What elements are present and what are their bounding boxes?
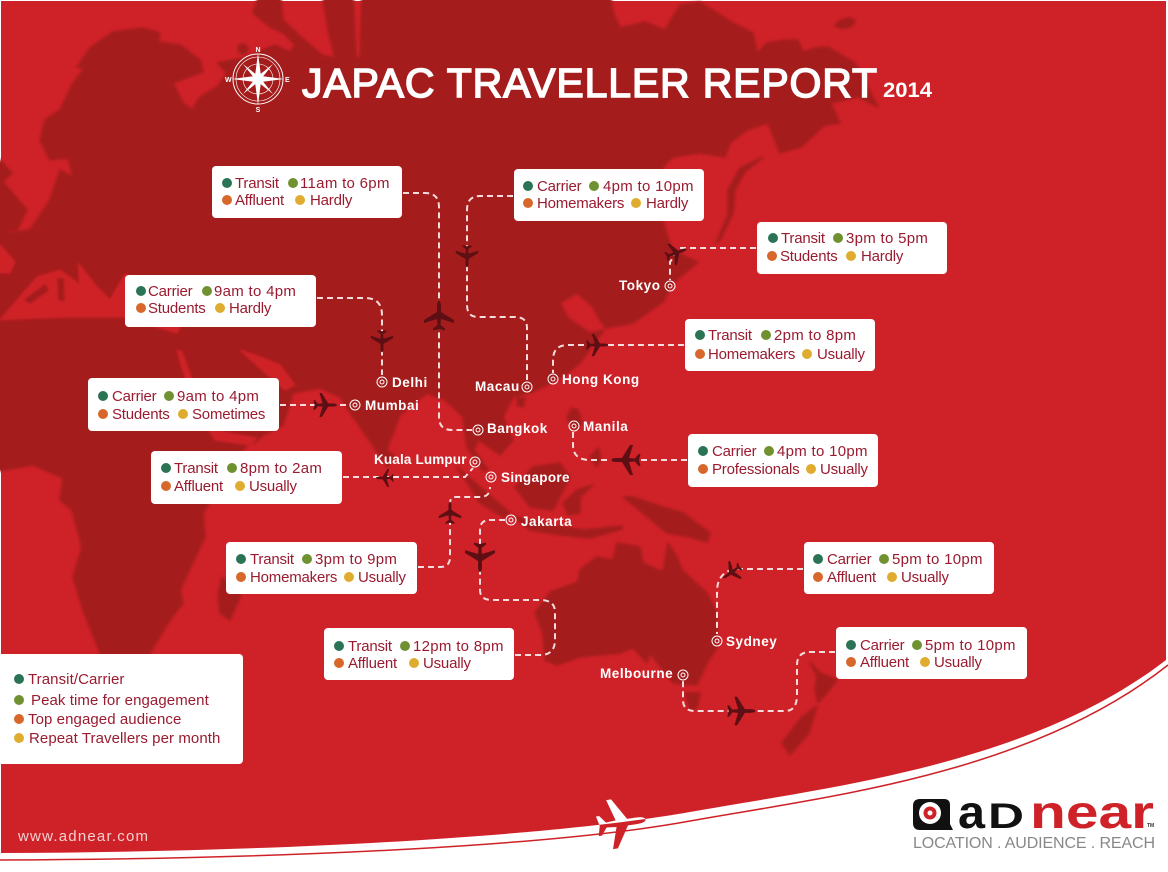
icon: plane to Sydney (717, 558, 746, 587)
Hainan (517, 398, 525, 407)
panel: Carrier 5pm to 10pm Melbourne: 5pm to 10pm (925, 637, 1016, 654)
icon: plane to Hong Kong (586, 334, 608, 356)
trademark: TM (1147, 823, 1154, 829)
panel: Transit 8pm to 2am (151, 451, 342, 504)
panel: Transit 12pm to 8pm: Affluent (348, 655, 398, 672)
logo wordmark: D (988, 797, 1024, 836)
panel: Transit 3pm to 9pm (226, 542, 417, 594)
Arctic islands (835, 18, 855, 28)
Philippines (567, 408, 601, 467)
panel: Carrier 9am to 4pm Students Sometimes: 9am to 4pm (177, 388, 259, 405)
panel: Carrier 5pm to 10pm Melbourne: Carrier (860, 637, 905, 654)
Borneo (515, 463, 570, 510)
panel: Transit 3pm to 5pm: Transit (781, 230, 826, 247)
Mediterranean sea (0, 263, 180, 333)
panel: Carrier 9am to 4pm Students Hardly: Students (148, 300, 206, 317)
legend: Transit/Carrier (28, 671, 124, 688)
panel: Carrier 4pm to 10pm: Homemakers (537, 195, 624, 212)
icon: plane to Delhi (371, 330, 393, 352)
icon: large plane on flight line (596, 799, 646, 850)
Mediterranean islands (25, 279, 64, 303)
panel: Transit 8pm to 2am: Affluent (174, 478, 224, 495)
panel: Carrier 5pm to 10pm Melbourne (836, 627, 1027, 679)
flight routes (280, 193, 835, 711)
panel: Carrier 4pm to 10pm Professionals: 4pm to 10pm (777, 443, 868, 460)
panel: Transit 3pm to 9pm: Homemakers (250, 569, 337, 586)
icon: compass rose: E (285, 77, 290, 84)
panel: Transit 2pm to 8pm: 2pm to 8pm (774, 327, 856, 344)
city marker: Kuala Lumpur: Kuala Lumpur (374, 452, 467, 467)
icon: plane to Melbourne (727, 697, 755, 725)
legend: Repeat Travellers per month (29, 730, 220, 747)
icon: plane to Jakarta (465, 542, 495, 572)
Bay of Biscay (0, 245, 15, 273)
panel: Transit 3pm to 9pm: Transit (250, 551, 295, 568)
panel: Carrier 4pm to 10pm Professionals: Carrier (712, 443, 757, 460)
title year: 2014 (883, 79, 932, 102)
Persian Gulf (240, 350, 295, 390)
icon: plane to Kuala Lumpur (376, 469, 394, 487)
panel: Carrier 5pm to 10pm Sydney: Usually (901, 569, 949, 586)
panel: Transit 12pm to 8pm: 12pm to 8pm (413, 638, 504, 655)
panel: Carrier 9am to 4pm Students Sometimes: Sometimes (192, 406, 265, 423)
Red Sea (177, 350, 257, 445)
panel: Transit 2pm to 8pm (685, 319, 875, 371)
panel: Transit 12pm to 8pm: Usually (423, 655, 471, 672)
panel: Transit 3pm to 5pm (757, 222, 947, 274)
panel: Carrier 4pm to 10pm: Hardly (646, 195, 689, 212)
icon: plane to Macau (456, 245, 478, 267)
adnear logo (913, 786, 1155, 852)
Sulawesi (563, 485, 593, 515)
New Guinea (623, 497, 710, 542)
city marker: Tokyo: Tokyo (619, 278, 661, 293)
panel: Transit 8pm to 2am: 8pm to 2am (240, 460, 322, 477)
Sri Lanka (384, 450, 395, 467)
legend (0, 654, 243, 764)
logo icon (913, 799, 953, 830)
city marker: Macau: Macau (475, 379, 520, 394)
Australia (535, 543, 718, 685)
panel: Carrier 4pm to 10pm Professionals: Professionals (712, 461, 799, 478)
Java (513, 516, 622, 538)
panel: Transit 11am to 6pm: Hardly (310, 192, 353, 209)
world map (0, 0, 878, 755)
panel: Carrier 9am to 4pm Students Sometimes: Carrier (112, 388, 157, 405)
panel: Transit 11am to 6pm: 11am to 6pm (300, 175, 390, 192)
panel: Transit 8pm to 2am: Transit (174, 460, 219, 477)
panel: Carrier 5pm to 10pm Sydney (804, 542, 994, 594)
panel: Carrier 9am to 4pm Students Hardly: 9am to 4pm (214, 283, 296, 300)
logo wordmark: near (1030, 786, 1154, 838)
panel: Carrier 5pm to 10pm Sydney: Carrier (827, 551, 872, 568)
Madagascar (218, 577, 241, 620)
curved flight line (0, 665, 1168, 860)
panel: Transit 2pm to 8pm: Transit (708, 327, 753, 344)
panel: Transit 3pm to 9pm: Usually (358, 569, 406, 586)
panel: Carrier 4pm to 10pm: Carrier (537, 178, 582, 195)
icon: compass rose: S (256, 107, 261, 114)
New Zealand (782, 662, 837, 755)
Tasmania (685, 693, 700, 710)
city marker: Jakarta: Jakarta (521, 514, 572, 529)
Eurasia and Africa landmass (0, 0, 878, 665)
panel: Transit 2pm to 8pm: Usually (817, 346, 865, 363)
city marker: Mumbai: Mumbai (365, 398, 419, 413)
city marker: Manila: Manila (583, 419, 628, 434)
city marker: Sydney: Sydney (726, 634, 777, 649)
legend: Top engaged audience (28, 711, 181, 728)
panel: Carrier 4pm to 10pm Professionals (688, 434, 878, 487)
panel: Transit 3pm to 5pm: Students (780, 248, 838, 265)
city marker: Singapore: Singapore (501, 470, 570, 485)
panel: Transit 11am to 6pm: Transit (235, 175, 280, 192)
panel: Carrier 4pm to 10pm Professionals: Usually (820, 461, 868, 478)
icon: compass rose: N (255, 47, 261, 54)
icon: compass rose (225, 47, 290, 114)
icon: plane to Manila (611, 445, 640, 475)
panel: Transit 11am to 6pm (212, 166, 402, 218)
icon: plane to Mumbai (313, 393, 337, 417)
title: JAPAC TRAVELLER REPORT (302, 60, 877, 106)
panel: Carrier 5pm to 10pm Melbourne: Affluent (860, 654, 910, 671)
panel: Carrier 9am to 4pm Students Sometimes (88, 378, 279, 431)
panel: Carrier 5pm to 10pm Sydney: 5pm to 10pm (892, 551, 983, 568)
city marker: Hong Kong: Hong Kong (562, 372, 640, 387)
panel: Carrier 9am to 4pm Students Hardly (125, 275, 316, 327)
panel: Transit 11am to 6pm: Affluent (235, 192, 285, 209)
Sumatra (457, 467, 510, 517)
panel: Transit 3pm to 5pm: 3pm to 5pm (846, 230, 928, 247)
icon: plane to Singapore (439, 502, 461, 524)
panel: Transit 2pm to 8pm: Homemakers (708, 346, 795, 363)
city marker: Bangkok: Bangkok (487, 421, 548, 436)
panel: Carrier 4pm to 10pm: 4pm to 10pm (603, 178, 694, 195)
panel: Carrier 4pm to 10pm (514, 169, 704, 221)
panel: Carrier 5pm to 10pm Melbourne: Usually (934, 654, 982, 671)
icon: plane to Tokyo (662, 239, 690, 267)
panel: Transit 8pm to 2am: Usually (249, 478, 297, 495)
panel: Carrier 9am to 4pm Students Hardly: Carrier (148, 283, 193, 300)
panel: Carrier 9am to 4pm Students Hardly: Hardly (229, 300, 272, 317)
city marker: Melbourne: Melbourne (600, 666, 673, 681)
logo tagline: LOCATION . AUDIENCE . REACH (913, 835, 1155, 852)
United Kingdom (0, 160, 27, 232)
city marker: Delhi: Delhi (392, 375, 428, 390)
panel: Transit 12pm to 8pm (324, 628, 514, 680)
panel: Transit 3pm to 5pm: Hardly (861, 248, 904, 265)
logo wordmark: a (958, 786, 985, 838)
panel: Carrier 9am to 4pm Students Sometimes: Students (112, 406, 170, 423)
icon: plane to Bangkok (424, 301, 454, 330)
panel: Carrier 5pm to 10pm Sydney: Affluent (827, 569, 877, 586)
icon: compass rose: W (225, 77, 232, 84)
legend: Peak time for engagement (31, 692, 210, 709)
website url: www.adnear.com (17, 828, 148, 845)
Sakhalin and Kuril islands (716, 157, 763, 243)
panel: Transit 12pm to 8pm: Transit (348, 638, 393, 655)
panel: Transit 3pm to 9pm: 3pm to 9pm (315, 551, 397, 568)
